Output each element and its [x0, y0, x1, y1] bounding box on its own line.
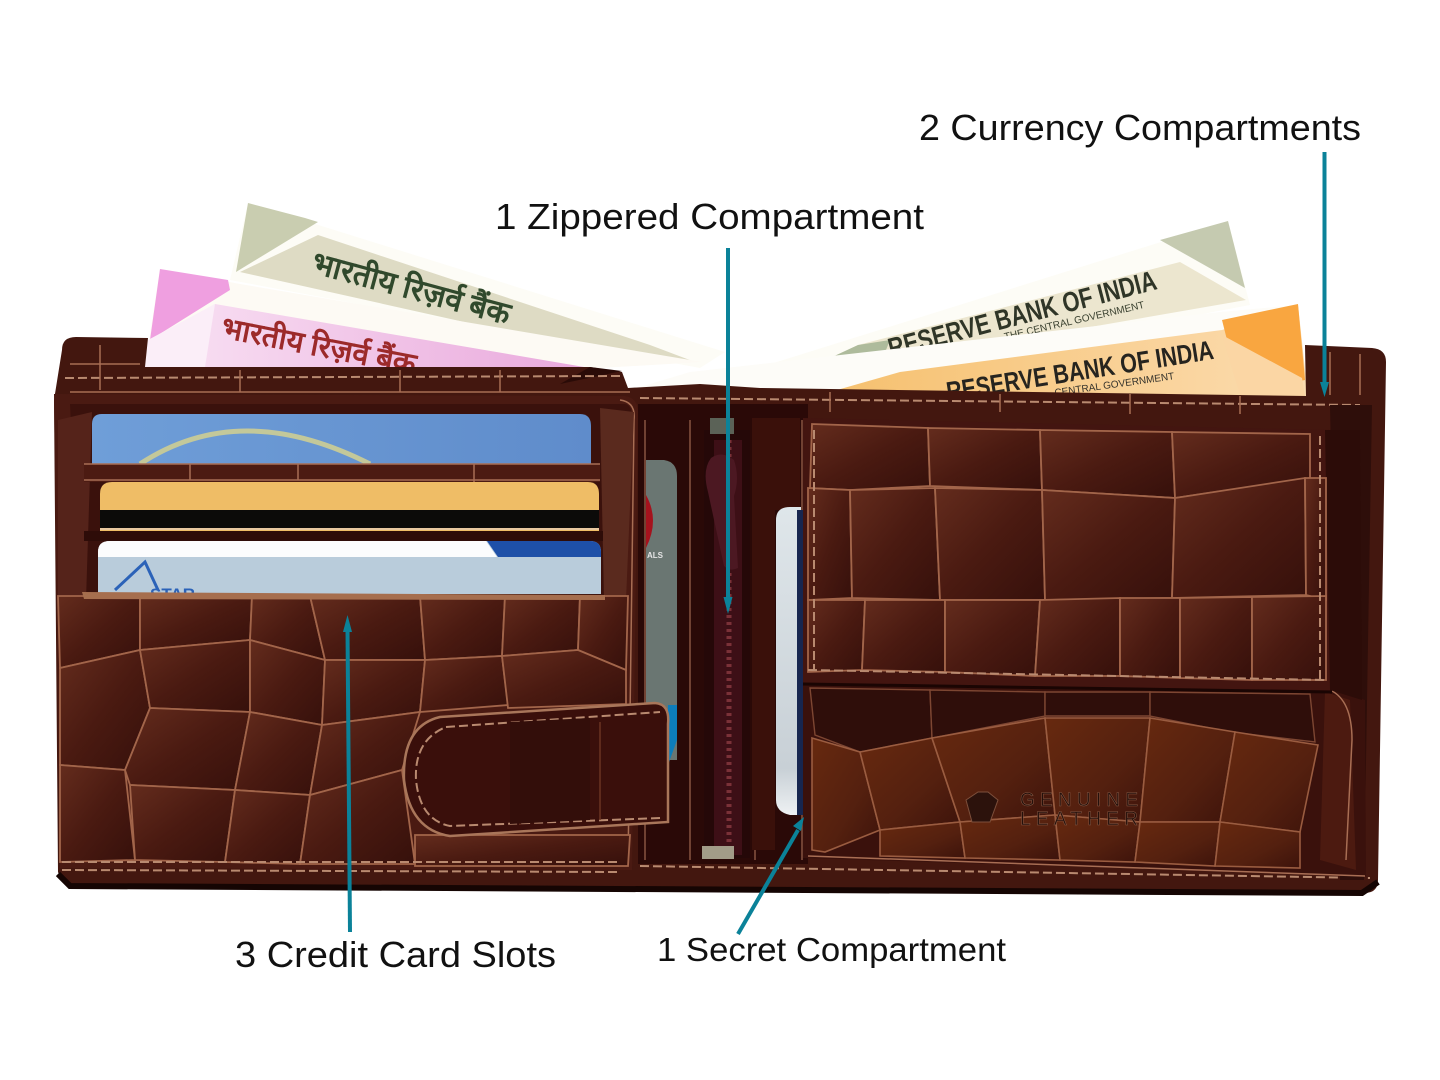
embossed logo: GENUINE	[1020, 790, 1138, 811]
arrow: secret	[738, 817, 804, 934]
banknotes: right: RESERVE BANK OF INDIA	[944, 335, 1216, 407]
card 2 gold	[100, 482, 599, 531]
card 3 white and blue	[98, 541, 601, 604]
banknotes: right: CENTRAL GOVERNMENT	[1054, 371, 1175, 399]
outer bottom edge	[58, 874, 1378, 893]
slot strip 2	[84, 531, 603, 541]
coin flap	[803, 418, 1362, 700]
wallet body: LEATHER	[1020, 809, 1138, 830]
panel: card slots	[54, 394, 638, 870]
wallet body	[54, 337, 1386, 893]
croc scales: left panel	[58, 592, 630, 866]
banknotes: right: RESERVE BANK OF INDIA	[885, 265, 1160, 364]
banknotes: left: भारतीय रिज़र्व बैंक	[219, 310, 420, 382]
label: 2 currency compartments: 2 Currency Compartments	[919, 107, 1361, 148]
strap with snap tab	[404, 703, 668, 836]
centre gusset	[638, 404, 808, 864]
banknotes: right: THE CENTRAL GOVERNMENT	[1003, 300, 1146, 343]
zipper	[702, 418, 750, 859]
top welt	[65, 376, 620, 378]
grey patterned card	[646, 460, 677, 765]
banknotes: left	[145, 203, 725, 382]
arrow: currency	[1320, 152, 1329, 397]
arrow: zippered	[724, 248, 732, 614]
card 3 white and blue: STAR	[150, 585, 195, 604]
label: 1 secret compartment: 1 Secret Compartment	[657, 931, 1006, 968]
grey patterned card: ALS	[647, 551, 664, 560]
arrow: credit card slots	[343, 615, 352, 932]
right lower pocket	[803, 685, 1366, 876]
white secret card	[776, 507, 803, 815]
slot strip 1	[84, 464, 600, 482]
label: 1 zippered compartment: 1 Zippered Compartment	[495, 196, 924, 237]
label: 3 credit card slots: 3 Credit Card Slots	[235, 934, 556, 975]
banknotes: left: भारतीय रिज़र्व बैंक	[308, 244, 516, 332]
banknotes: right	[778, 221, 1306, 396]
card 1 blue	[92, 414, 591, 466]
